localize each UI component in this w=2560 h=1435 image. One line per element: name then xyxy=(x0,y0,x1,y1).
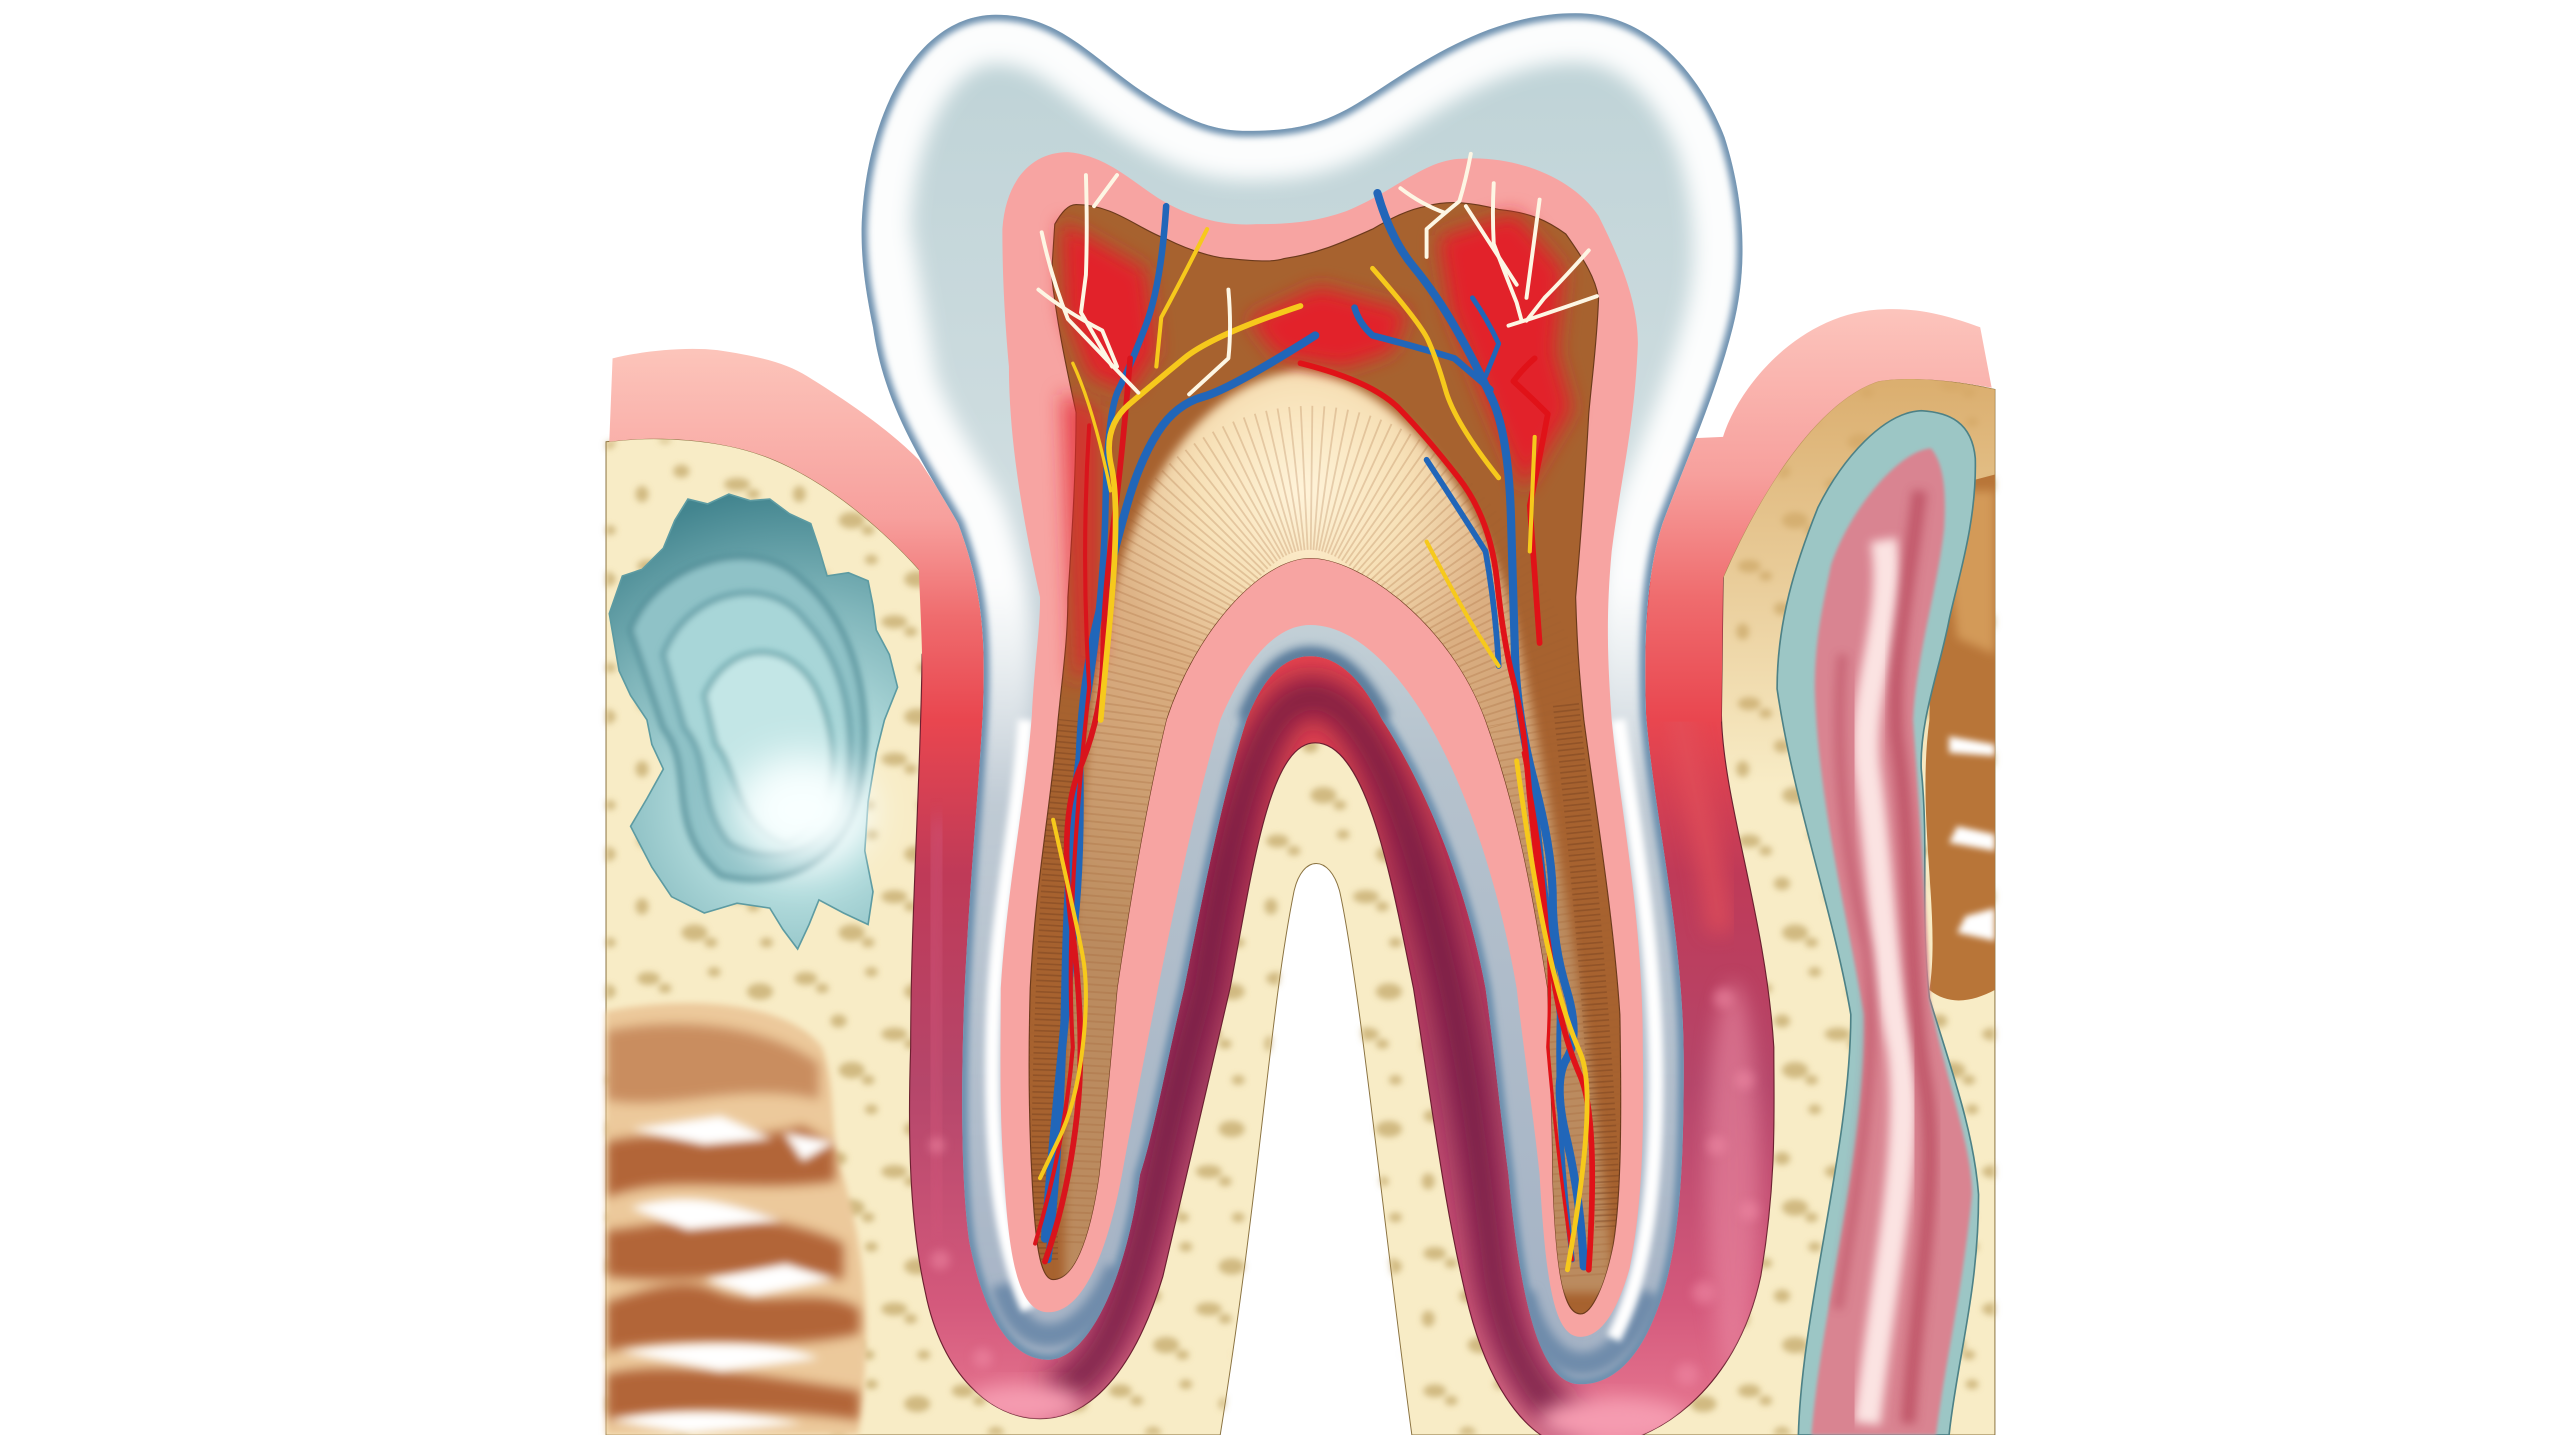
white nerves xyxy=(1038,154,1597,394)
tooth enamel xyxy=(862,13,1742,1384)
gum around the roots xyxy=(909,491,1774,1435)
left root arteries xyxy=(1035,358,1130,1262)
left root veins xyxy=(1045,206,1315,1260)
right gum cap xyxy=(1638,309,1992,722)
right brown strata xyxy=(1925,474,1995,1000)
left brown strata xyxy=(606,995,884,1435)
cream dentin fan xyxy=(1065,370,1613,1293)
right teal and pink tissue xyxy=(1777,411,1998,1435)
bone tissue xyxy=(606,379,1995,1435)
right root yellow fibres xyxy=(1373,268,1587,1270)
left gum cap xyxy=(609,349,993,722)
right root arteries xyxy=(1300,358,1592,1270)
dentin pink layer xyxy=(1000,152,1643,1337)
right root veins xyxy=(1355,193,1584,1266)
left root yellow fibres xyxy=(1040,229,1300,1178)
pulp chamber xyxy=(1029,203,1621,1314)
red tissue zones xyxy=(1061,213,1572,687)
left teal lesion xyxy=(609,494,898,949)
blood vessels and nerves xyxy=(1035,154,1597,1270)
illustration: tooth anatomy cross-section xyxy=(600,13,1999,1435)
